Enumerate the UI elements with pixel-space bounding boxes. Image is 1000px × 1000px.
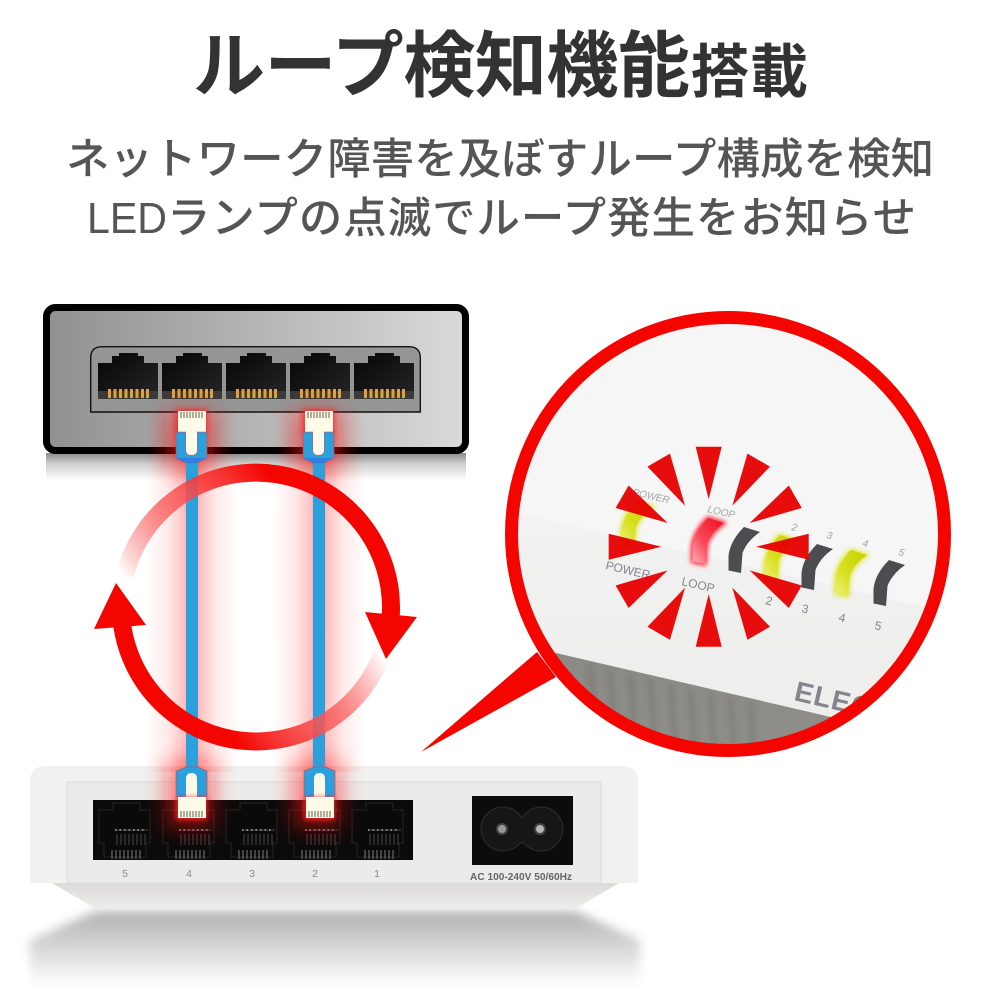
- title: ループ検知機能: [193, 27, 690, 107]
- port 3 led off: [802, 544, 833, 590]
- callout magnifier: [505, 311, 951, 757]
- top labels: 2: [789, 522, 799, 534]
- cable right: [303, 410, 335, 820]
- top switch reflection: [46, 453, 466, 480]
- loop arrow: clockwise lower arc: [94, 583, 383, 741]
- callout pointer: [421, 652, 556, 752]
- cable left: [176, 410, 207, 820]
- port numbers: 4: [186, 868, 192, 880]
- port numbers: 2: [312, 868, 318, 880]
- top plug: [176, 410, 207, 463]
- port 2 led: [764, 535, 796, 581]
- port numbers: 5: [122, 868, 128, 880]
- top switch: [46, 308, 466, 450]
- front labels: POWER: [604, 558, 652, 582]
- led panel photo: [548, 488, 910, 744]
- front labels: 5: [873, 618, 883, 633]
- bottom plug: [304, 767, 335, 820]
- port 1 led off: [728, 527, 760, 573]
- case body: [30, 766, 638, 883]
- port numbers: 3: [249, 868, 255, 880]
- top labels: 5: [897, 547, 906, 559]
- voltage label: AC 100-240V 50/60Hz: [470, 871, 572, 883]
- port numbers: [122, 868, 380, 880]
- top labels: POWER: [631, 487, 671, 506]
- vents: [554, 652, 831, 744]
- top labels: 4: [861, 538, 870, 550]
- front face: [548, 639, 910, 717]
- top labels: LOOP: [706, 504, 736, 521]
- title: 搭載: [691, 40, 808, 105]
- front labels: 3: [800, 601, 810, 616]
- subtitle: LED: [87, 195, 167, 243]
- bottom switch shadow: [30, 911, 640, 986]
- faceplate: [67, 782, 601, 883]
- loop led: [692, 518, 724, 564]
- port bay: [91, 347, 420, 412]
- lens ring: [512, 318, 944, 750]
- subtitle: ネットワーク障害を及ぼすループ構成を検知: [66, 136, 934, 184]
- front labels: 2: [764, 593, 774, 608]
- port 4 led: [836, 550, 867, 596]
- loop arrow: clockwise upper arc: [125, 473, 417, 659]
- power led: [622, 502, 653, 548]
- brand text: ELECOM: [792, 676, 921, 734]
- top labels: [631, 487, 906, 559]
- front labels: 4: [837, 610, 847, 625]
- top labels: 3: [825, 530, 834, 542]
- cable glow: [146, 411, 365, 828]
- bottom switch: [30, 766, 638, 909]
- port numbers: 1: [374, 868, 380, 880]
- front labels: [604, 558, 883, 633]
- lan ports: [93, 800, 413, 860]
- top plug: [303, 410, 334, 463]
- subtitle: ランプの点滅でループ発生をお知らせ: [167, 195, 916, 243]
- arrowhead right: [365, 612, 417, 659]
- power inlet: [472, 796, 573, 865]
- case underside: [47, 880, 624, 909]
- subtitle: [66, 136, 934, 243]
- front labels: LOOP: [680, 574, 716, 595]
- arrowhead left: [94, 583, 146, 629]
- bottom plug: [176, 767, 207, 820]
- blink rays: [609, 447, 809, 647]
- port 5 led off: [874, 560, 905, 606]
